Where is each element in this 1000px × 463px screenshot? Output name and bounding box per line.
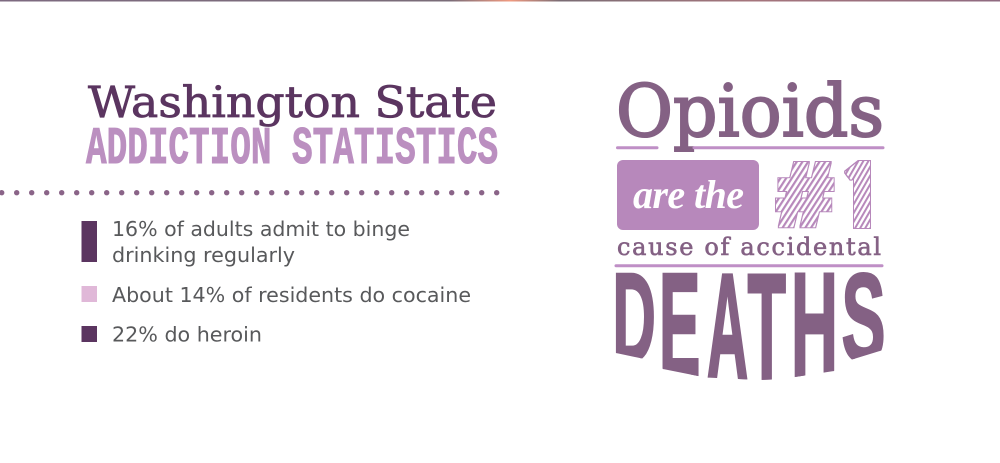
- word: DEATHS, arched baseline: S: [842, 250, 886, 389]
- word: Opioids: Opioids: [616, 69, 884, 153]
- word: DEATHS, arched baseline: A: [706, 243, 748, 413]
- word: DEATHS, arched baseline: E: [659, 243, 700, 409]
- word: DEATHS, arched baseline: H: [791, 243, 838, 409]
- rule beneath cause of accidental: [616, 264, 882, 267]
- stat: binge drinking: drinking regularly: [112, 243, 295, 267]
- badge: are the: are the: [633, 172, 744, 217]
- word: DEATHS, arched baseline: D: [612, 246, 656, 388]
- stat: binge drinking: [82, 217, 410, 267]
- hatched number: #1: 1: [833, 139, 889, 251]
- hatched number: #1: [775, 160, 871, 229]
- stat list: [82, 217, 471, 346]
- top edge strip: [0, 0, 1000, 2]
- heading: Addiction Statistics: ADDICTION STATISTICS: [86, 120, 498, 180]
- stat: heroin: 22% do heroin: [112, 322, 262, 346]
- stat: cocaine: About 14% of residents do cocaine: [112, 283, 471, 307]
- word: DEATHS, arched baseline: [616, 272, 884, 380]
- hatched number: #1: #: [778, 147, 832, 243]
- underline rule beneath Opioids: [618, 146, 883, 149]
- word: DEATHS, arched baseline: T: [748, 241, 786, 413]
- heading: Washington State: Washington State: [88, 78, 497, 128]
- stat: binge drinking: 16% of adults admit to binge: [112, 217, 410, 241]
- badge: are the: [617, 160, 759, 230]
- callout: opioids number one cause: [614, 80, 884, 380]
- text: cause of accidental: cause of accidental: [617, 233, 881, 261]
- dotted divider: [2, 190, 497, 195]
